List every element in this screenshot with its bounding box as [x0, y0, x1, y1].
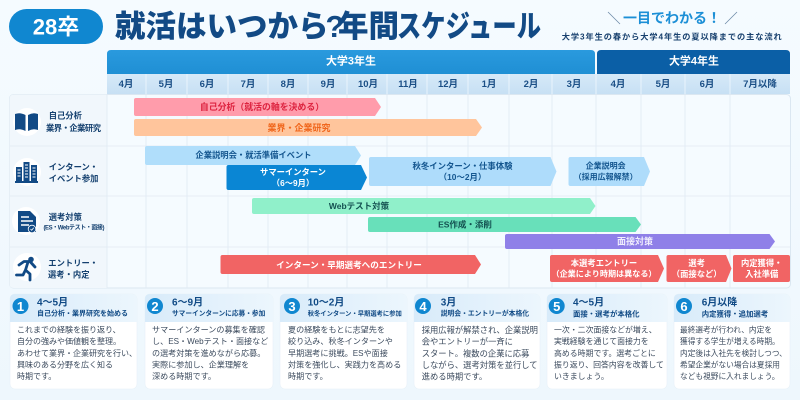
title: スケジュール [397, 10, 541, 44]
bar: ES作成・添削 [368, 217, 641, 232]
month row: 6月 [200, 79, 214, 90]
bar: インターン・早期選考へのエントリー: インターン・早期選考へのエントリー [276, 259, 422, 270]
month row: 6月 [700, 79, 714, 90]
panel: step 1: 興味のある分野を広く知る [17, 360, 113, 370]
header: 大学3年生 [107, 50, 595, 74]
bar: サマーインターン: （6〜9月） [272, 178, 314, 188]
panel: step 5: 4〜5月 [573, 296, 604, 308]
bar: 選考(面接など): （面接など） [672, 269, 722, 279]
panel: step 3: 夏の経験をもとに志望先を [288, 324, 385, 334]
panel: step 1: 自己分析・業界研究を始める [37, 308, 128, 318]
header: 大学3年生: 大学3年生 [326, 54, 376, 68]
row label: エントリー・選考・内定: エントリー・ [48, 258, 98, 268]
month row: 5月 [656, 79, 670, 90]
icon: office buildings [15, 162, 38, 183]
panel: step 3: 対策を強化し、実践力を高める [288, 360, 401, 370]
panel: step 4: 3月 [441, 296, 456, 308]
panel: step 3: 3 [288, 299, 296, 314]
bar: 企業説明会・就活準備イベント: 企業説明会・就活準備イベント [195, 150, 312, 160]
panel: step 2: し、ES・Webテスト・面接など [152, 336, 268, 346]
bar: ES作成・添削: ES作成・添削 [438, 220, 492, 230]
icon: runner [16, 257, 35, 280]
bar: インターン・早期選考へのエントリー [220, 255, 481, 274]
bar: 企業説明会(採用広報解禁): （採用広報解禁） [574, 172, 638, 182]
title [115, 10, 541, 44]
bar: 自己分析 [134, 98, 381, 116]
panel: step 4: 進める時期です。 [422, 372, 487, 382]
callout: subtitle: 大学3年生の春から大学4年生の夏以降までの主な流れ [562, 32, 782, 42]
panel: step 4: スタート。複数の企業に応募 [422, 348, 530, 358]
panel: step 2: サマーインターンの募集を確認 [152, 324, 265, 334]
icon: open book [15, 113, 38, 131]
panel: step 3 [280, 294, 407, 389]
month row: 7月以降 [743, 78, 777, 90]
bar: 本選考エントリー: （企業により時期は異なる） [551, 268, 657, 278]
month row: 4月 [119, 79, 133, 90]
badge: 28卒 [9, 9, 103, 44]
row label: エントリー・選考・内定: 選考・内定 [48, 270, 90, 280]
row label: 自己分析・業界企業研究: 業界・企業研究 [46, 123, 102, 133]
badge: 28卒: 28卒 [33, 14, 79, 40]
panel: schedule table [10, 94, 790, 288]
panel: step 1: 1 [17, 299, 24, 314]
bar: 自己分析: 自己分析（就活の軸を決める） [200, 101, 324, 112]
panel: step 1: これまでの経験を振り返り、 [17, 324, 121, 334]
bar: Webテスト対策 [252, 198, 596, 214]
bar: 秋冬インターン・仕事体験: （10〜2月） [439, 172, 486, 182]
icon: document with check [18, 211, 36, 233]
panel: step 6: 希望企業がない場合は夏採用 [680, 360, 780, 370]
panel: step 1 [10, 294, 137, 389]
panel: step 1: 時期です。 [17, 372, 56, 381]
bar: 業界・企業研究 [134, 119, 482, 136]
month row: 4月 [611, 79, 625, 90]
panel: step 6: 内定後は入社先を検討しつつ、 [680, 348, 787, 358]
panel: step 2: サマーインターンに応募・参加 [172, 308, 266, 318]
panel: step 5: 5 [553, 299, 560, 314]
bar: 本選考エントリー: 本選考エントリー [571, 258, 637, 268]
title: 就活はいつから [115, 10, 328, 44]
month row: 8月 [281, 79, 295, 90]
panel: step 5: 振り返り、回答内容を改善して [554, 360, 664, 370]
panel: step 3: 絞り込み、秋冬インターンや [288, 336, 393, 346]
bar: 本選考エントリー [550, 255, 664, 282]
header: 大学4年生: 大学4年生 [669, 54, 719, 68]
panel: step 3: 秋冬インターン・早期選考に参加 [308, 308, 402, 318]
panel: step 6: なども視野に入れましょう。 [680, 371, 779, 381]
panel: step 2: の選考対策を進めながら応募。 [152, 348, 265, 358]
row label: 選考対策: 選考対策 [49, 212, 83, 222]
panel: step 5: 実戦経験を通じて面接力を [554, 336, 649, 346]
panel: step 3: 10〜2月 [308, 296, 344, 308]
bar: Webテスト対策: Webテスト対策 [329, 201, 390, 211]
bar: 選考(面接など) [666, 255, 732, 282]
callout: subtitle [562, 10, 782, 42]
bar: サマーインターン [226, 165, 367, 190]
row label: インターン・イベント参加: イベント参加 [49, 174, 98, 184]
month row: 10月 [358, 79, 378, 90]
panel: step 3: 早期選考に挑戦。ESや面接 [288, 348, 388, 358]
bar: 選考(面接など): 選考 [688, 258, 705, 268]
bar: 面接対策 [505, 234, 775, 249]
panel: step 2: 深める時期です。 [152, 372, 216, 381]
panel: step 6: 6月以降 [702, 296, 737, 308]
month row: 9月 [321, 79, 335, 90]
panel: step 3: 時期です。 [288, 372, 328, 381]
bar: 企業説明会(採用広報解禁) [568, 157, 650, 186]
month row: 1月 [482, 79, 496, 90]
panel: step 4 [414, 294, 540, 389]
month row: 12月 [438, 79, 458, 90]
panel: step 2 [145, 294, 273, 389]
row label: インターン・イベント参加 [13, 158, 98, 186]
title: ? [326, 10, 344, 44]
month row: 3月 [567, 79, 581, 90]
bar: 企業説明会・就活準備イベント [145, 146, 361, 165]
panel: step 6: 最終選考が行われ、内定を [680, 324, 772, 334]
panel: step 4: 説明会・エントリーが本格化 [441, 308, 529, 318]
panel: step 6: 獲得する学生が増える時期。 [680, 336, 780, 346]
callout: subtitle: 一目でわかる！ [623, 10, 721, 26]
row label: インターン・イベント参加: インターン・ [49, 162, 98, 172]
month row: 2月 [524, 79, 538, 90]
title: 年間 [338, 10, 399, 44]
month row: 7月 [241, 79, 255, 90]
bar: 面接対策: 面接対策 [617, 236, 653, 246]
panel: step 4: しながら、選考対策を並行して [422, 360, 538, 370]
row label: 自己分析・業界企業研究: 自己分析 [49, 110, 83, 120]
panel: step 2: 6〜9月 [172, 296, 203, 308]
panel: step 5: 一次・二次面接などが増え、 [554, 324, 657, 334]
row label: 自己分析・業界企業研究 [13, 108, 102, 136]
panel: step 4: 4 [419, 299, 427, 314]
header: 大学4年生 [597, 50, 790, 74]
bar: 内定獲得・入社準備 [733, 255, 790, 282]
panel: step 5: いきましょう。 [554, 372, 609, 381]
panel: step 5: 高める時期です。選考ごとに [554, 348, 656, 358]
bar: 内定獲得・入社準備: 入社準備 [745, 269, 779, 279]
bar: サマーインターン: サマーインターン [260, 167, 326, 177]
panel: step 5 [547, 294, 667, 389]
panel: step 6 [674, 294, 790, 389]
panel: step 1: 4〜5月 [37, 296, 68, 308]
panel: step 6: 内定獲得・追加選考 [702, 310, 768, 318]
bar: 企業説明会(採用広報解禁): 企業説明会 [586, 160, 626, 170]
bar: 秋冬インターン・仕事体験: 秋冬インターン・仕事体験 [412, 161, 513, 171]
panel: step 4: 採用広報が解禁され、企業説明 [422, 325, 538, 335]
panel: step 1: あわせて業界・企業研究を行い、 [17, 348, 137, 358]
panel: step 1: 自分の強みや価値観を整理。 [17, 336, 121, 346]
row label: エントリー・選考・内定 [13, 253, 98, 281]
panel: step 4: 会やエントリーが一斉に [422, 337, 513, 347]
month row [107, 74, 790, 94]
month row: 11月 [398, 79, 418, 90]
month row: 5月 [159, 79, 173, 90]
panel: step 2: 2 [151, 299, 159, 314]
panel: step 2: 実際に参加し、企業理解を [152, 360, 249, 370]
bar: 秋冬インターン・仕事体験 [369, 157, 556, 186]
panel: step 5: 面接・選考が本格化 [573, 310, 640, 318]
panel: step 6: 6 [680, 299, 688, 314]
bar: 内定獲得・入社準備: 内定獲得・ [741, 258, 782, 268]
row label: 選考対策 [12, 207, 104, 235]
bar: 業界・企業研究: 業界・企業研究 [267, 122, 331, 133]
row label: 選考対策: (ES・Webテスト・面接) [44, 224, 104, 232]
